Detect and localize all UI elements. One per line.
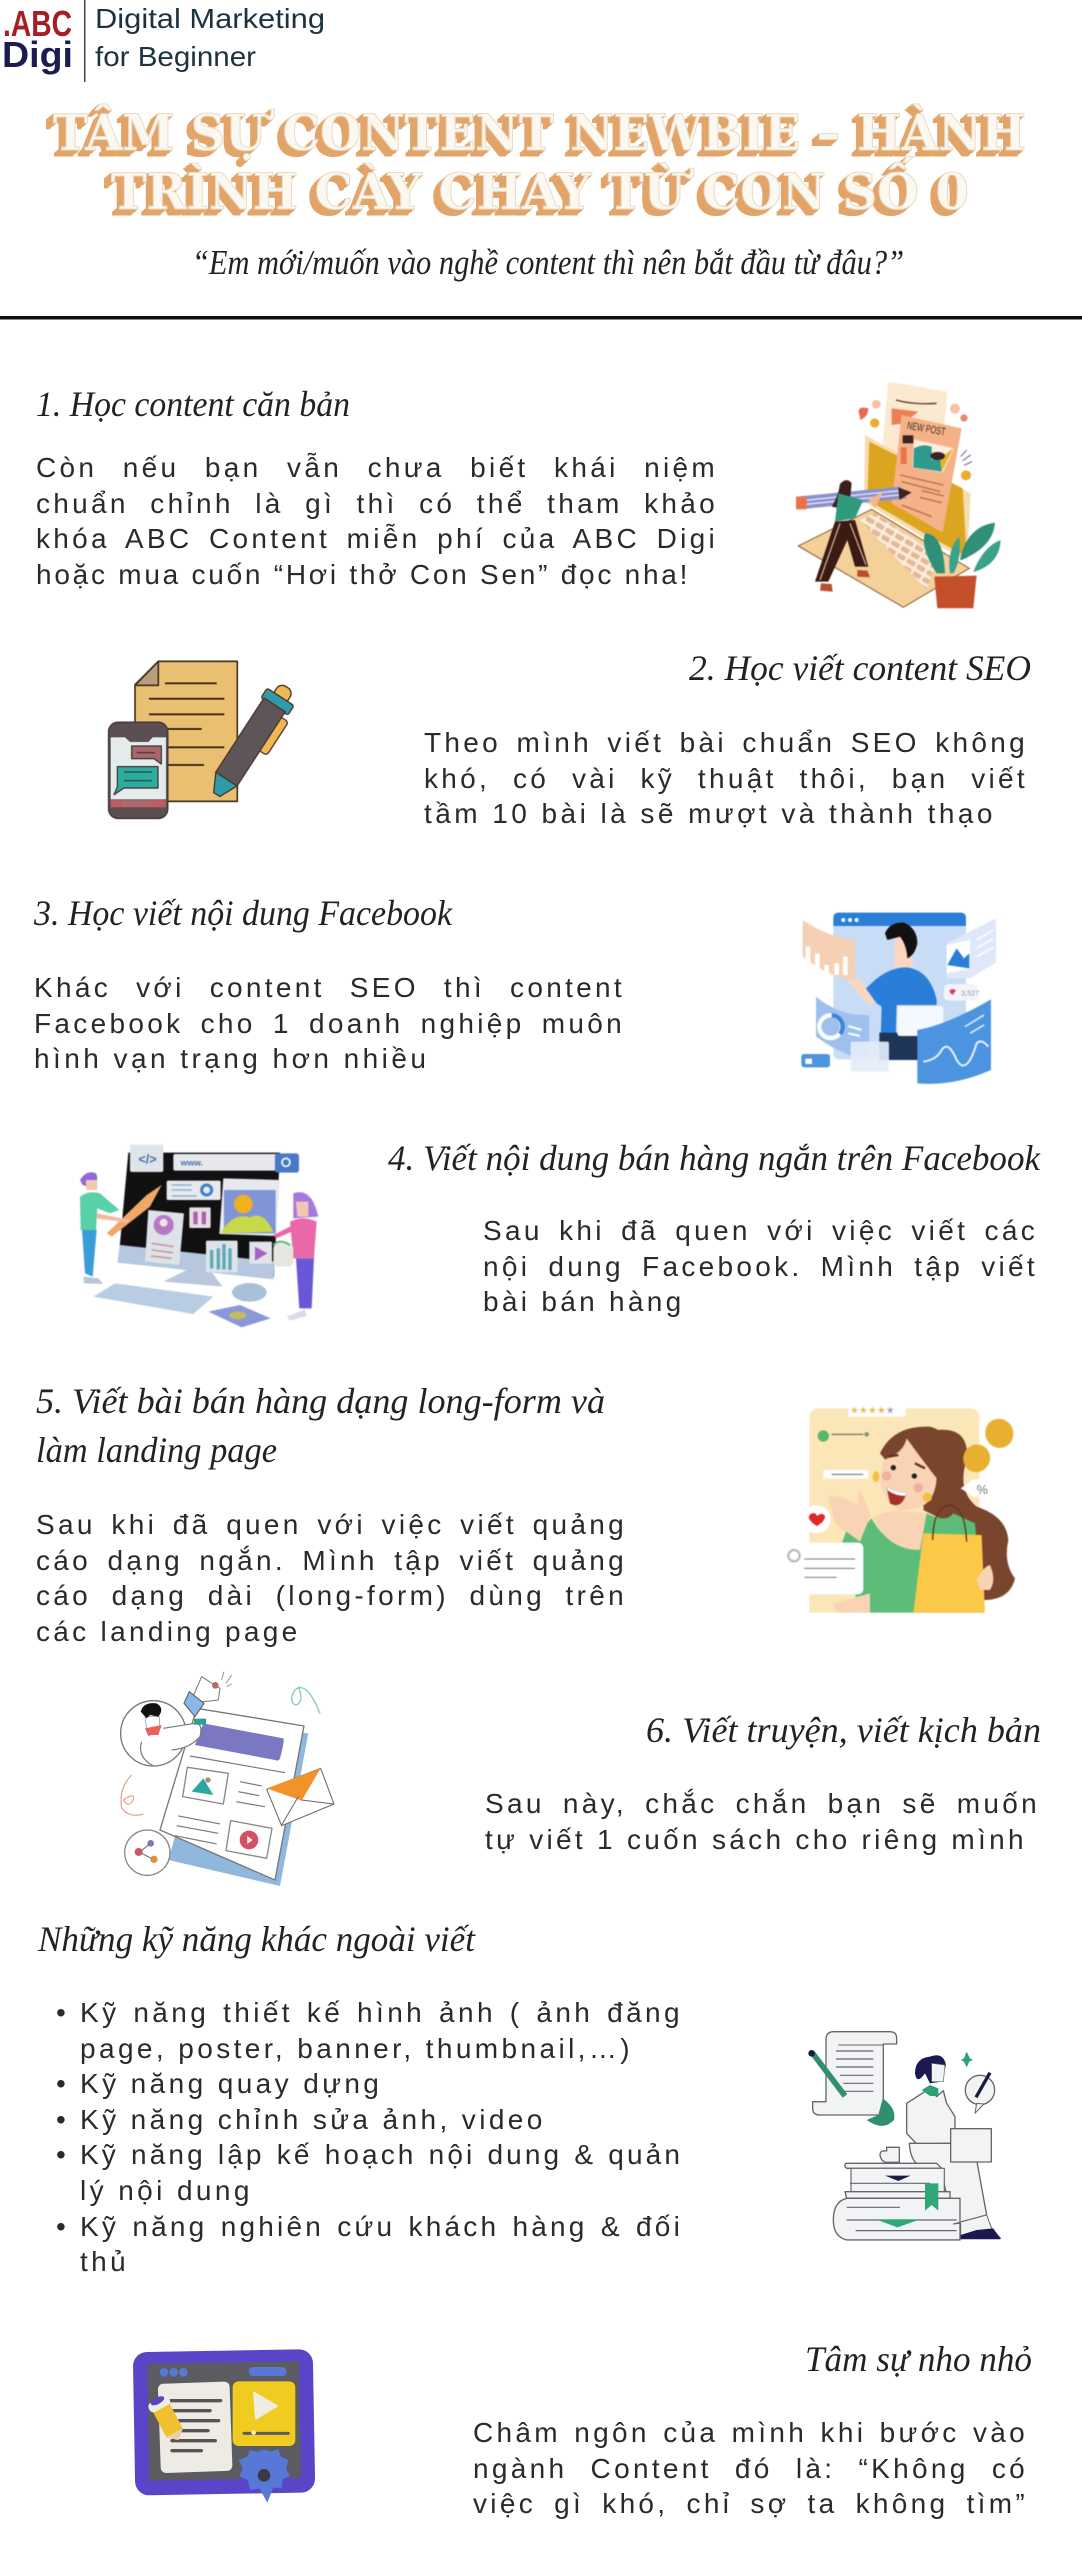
heading 5: 5. Viết bài bán hàng dạng long-form và [36, 1381, 605, 1421]
icon: document, phone and pen [109, 661, 304, 818]
icon: website design illustration: www. [180, 1157, 203, 1167]
title [53, 103, 1026, 221]
list: other skills: Kỹ năng chỉnh sửa ảnh, video [80, 2104, 546, 2135]
icon: new post illustration [796, 382, 1001, 608]
text block: section 2 [424, 727, 1028, 829]
heading 5 [36, 1381, 605, 1470]
icon: newsletter and email illustration [121, 1672, 334, 1886]
text block: section 1: hoặc mua cuốn “Hơi thở Con Sen” đọc nha! [36, 559, 690, 590]
text block: closing: việc gì khó, chỉ sợ ta không tìm” [473, 2488, 1028, 2519]
heading 3: 3. Học viết nội dung Facebook [33, 893, 453, 933]
title: TRÌNH CÀY CHAY TỪ CON SỐ 0 [111, 155, 969, 221]
text block: section 3 [34, 972, 625, 1074]
text block: section 1: Còn nếu bạn vẫn chưa biết khái niệm [36, 452, 718, 483]
list: other skills: Kỹ năng lập kế hoạch nội dung & quản [80, 2139, 683, 2170]
text block: section 4: Sau khi đã quen với việc viết các [483, 1215, 1038, 1246]
text block: section 5: các landing page [36, 1616, 301, 1647]
list: other skills: Kỹ năng nghiên cứu khách hàng & đối [80, 2211, 683, 2242]
text block: section 1: chuẩn chỉnh là gì thì có thể tham khảo [36, 488, 718, 519]
title: TÂM SỰ CONTENT NEWBIE – HÀNH [53, 103, 1026, 162]
text block: section 6: tự viết 1 cuốn sách cho riêng mình [485, 1824, 1027, 1855]
text block: closing [473, 2417, 1028, 2519]
text block: closing: Châm ngôn của mình khi bước vào [473, 2417, 1028, 2448]
heading: other skills: Những kỹ năng khác ngoài viết [37, 1919, 476, 1959]
text block: section 5: cáo dạng dài (long-form) dùng trên [36, 1580, 627, 1611]
text: • [56, 2211, 69, 2242]
icon: social media analytics illustration: 3,527 [961, 988, 979, 997]
list: other skills: Kỹ năng quay dựng [80, 2068, 382, 2099]
heading 2: 2. Học viết content SEO [689, 648, 1031, 688]
text block: section 4: nội dung Facebook. Mình tập viết [483, 1251, 1038, 1282]
icon: 3D content dashboard [133, 2349, 315, 2503]
subtitle quote: “Em mới/muốn vào nghề content thì nên bắt đầu từ đâu?” [192, 243, 904, 282]
list: other skills: thủ [80, 2246, 129, 2277]
text block: section 5 [36, 1509, 627, 1647]
icon: shopping woman illustration [788, 1404, 1017, 1613]
icon: social media analytics illustration [801, 913, 996, 1084]
icon: woman writing on books illustration [808, 2032, 1001, 2240]
heading 5: làm landing page [36, 1430, 277, 1470]
text block: section 3: Facebook cho 1 doanh nghiệp muôn [34, 1008, 625, 1039]
list: other skills: Kỹ năng thiết kế hình ảnh ( ảnh đăng [80, 1997, 683, 2028]
text: • [56, 2104, 69, 2135]
text block: section 4: bài bán hàng [483, 1286, 685, 1317]
heading 6: 6. Viết truyện, viết kịch bản [646, 1710, 1041, 1750]
text: • [56, 1997, 69, 2028]
icon: website design illustration [80, 1145, 318, 1327]
heading 1: 1. Học content căn bản [36, 384, 350, 424]
text: • [56, 2139, 69, 2170]
text block: section 2: khó, có vài kỹ thuật thôi, bạn viết [424, 763, 1028, 794]
heading 4: 4. Viết nội dung bán hàng ngắn trên Facebook [388, 1138, 1041, 1178]
logo: ABC Digi: for Beginner [95, 41, 256, 72]
text block: section 3: Khác với content SEO thì content [34, 972, 625, 1003]
icon: website design illustration: </> [138, 1152, 157, 1166]
list: other skills [56, 1997, 683, 2277]
icon: shopping woman illustration: % [977, 1483, 988, 1497]
logo: ABC Digi: .ABC [3, 3, 72, 44]
text: • [56, 2068, 69, 2099]
logo: ABC Digi: Digital Marketing [95, 3, 325, 34]
text block: section 3: hình vạn trạng hơn nhiều [34, 1043, 429, 1074]
icon: shopping woman illustration: ★★★★★ [850, 1405, 895, 1416]
logo: ABC Digi: Digi [2, 34, 73, 75]
text block: closing: ngành Content đó là: “Không có [473, 2453, 1028, 2484]
text block: section 5: cáo dạng ngắn. Mình tập viết quảng [36, 1545, 627, 1576]
logo: ABC Digi [2, 0, 325, 82]
text block: section 1 [36, 452, 718, 590]
text block: section 4 [483, 1215, 1038, 1317]
text block: section 2: Theo mình viết bài chuẩn SEO không [424, 727, 1028, 758]
heading: closing: Tâm sự nho nhỏ [805, 2339, 1032, 2379]
text block: section 1: khóa ABC Content miễn phí của ABC Digi [36, 523, 718, 554]
list: other skills: page, poster, banner, thumbnail,…) [80, 2033, 633, 2064]
icon: new post illustration: NEW POST [906, 420, 947, 438]
list: other skills: lý nội dung [80, 2175, 253, 2206]
text block: section 6: Sau này, chắc chắn bạn sẽ muốn [485, 1788, 1040, 1819]
text block: section 2: tầm 10 bài là sẽ mượt và thành thạo [424, 798, 996, 829]
text block: section 5: Sau khi đã quen với việc viết quảng [36, 1509, 627, 1540]
text block: section 6 [485, 1788, 1040, 1855]
